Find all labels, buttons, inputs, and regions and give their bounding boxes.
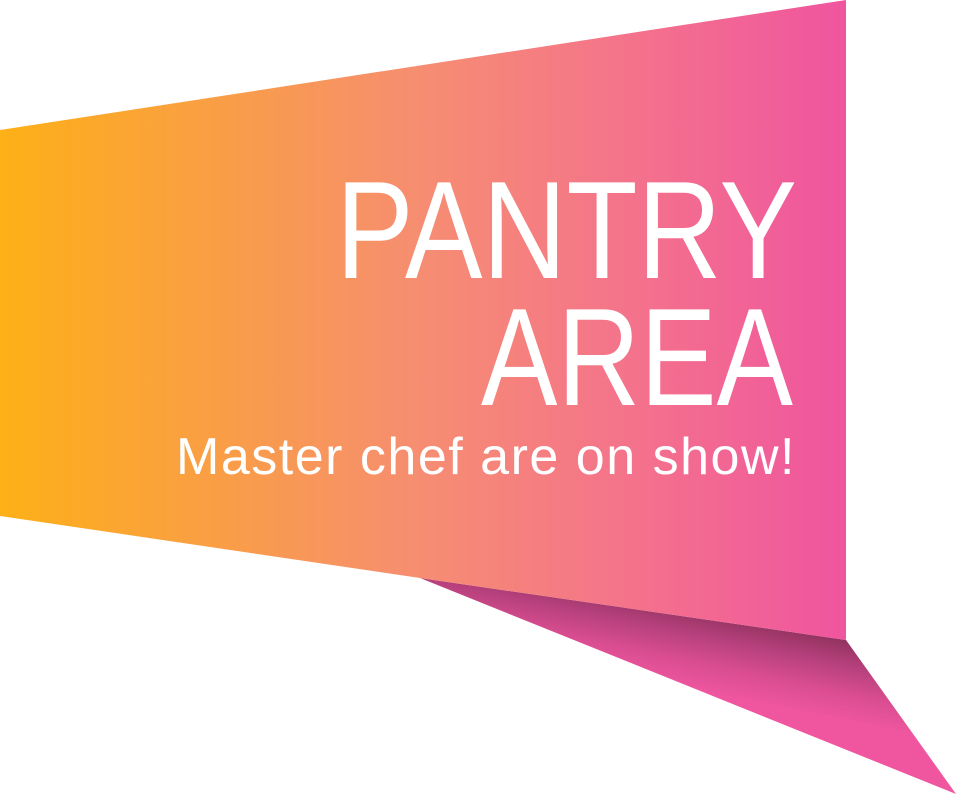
subtitle: Master chef are on show! xyxy=(176,428,796,486)
main banner panel xyxy=(0,0,846,640)
heading: PANTRY AREA: AREA xyxy=(481,280,793,435)
folded ribbon tail xyxy=(420,578,956,794)
heading: PANTRY AREA xyxy=(336,153,797,435)
heading: PANTRY AREA: PANTRY xyxy=(336,153,797,308)
